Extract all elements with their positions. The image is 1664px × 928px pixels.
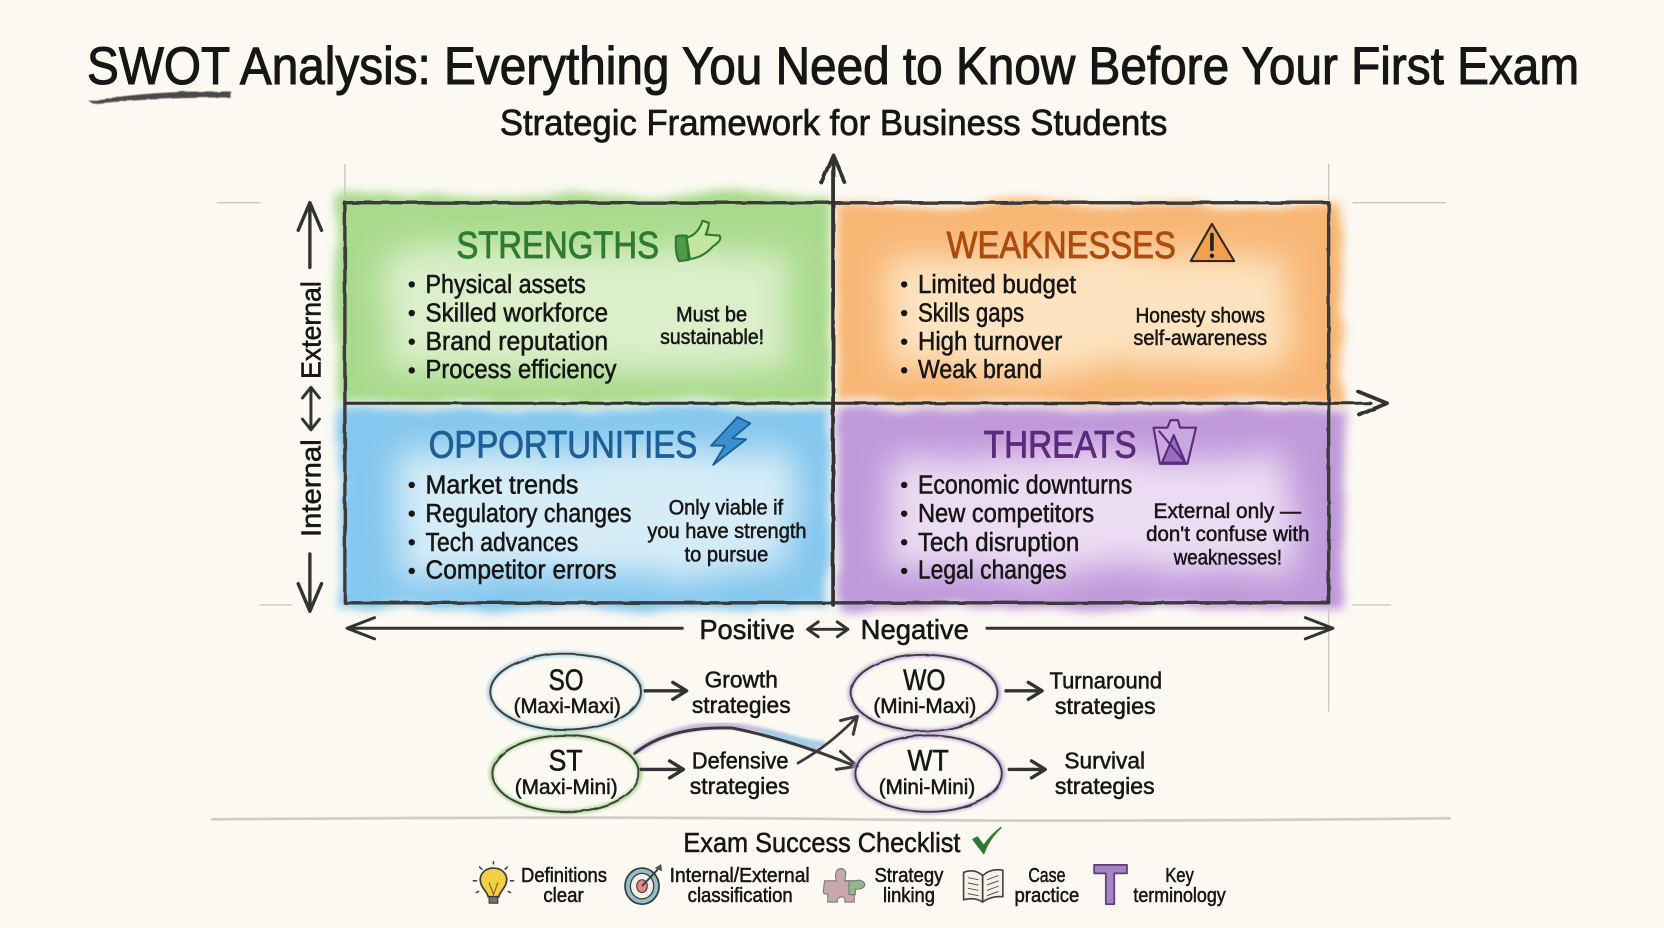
- axis label: positive to negative: Negative: [861, 614, 969, 645]
- panel: strengths: [337, 196, 830, 402]
- icon: open book: [964, 870, 1003, 902]
- list: opportunities: Competitor errors: [426, 556, 617, 584]
- arrow: horizontal axis head: [1358, 392, 1387, 415]
- note: threats: External only —: [1154, 500, 1302, 523]
- icon: target: [625, 864, 662, 904]
- item: strategy linking: [874, 865, 944, 907]
- axis label: internal to external: Internal: [295, 439, 326, 537]
- matrix grid with axis arrows: [345, 155, 1387, 605]
- node: ST: (Maxi-Mini): [515, 776, 618, 799]
- list: strengths: Physical assets: [426, 271, 586, 299]
- label: growth strategies: strategies: [692, 692, 791, 718]
- note: threats: don't confuse with: [1146, 523, 1310, 546]
- list: threats: Legal changes: [918, 556, 1067, 584]
- label: defensive strategies: strategies: [690, 773, 790, 799]
- green watercolor wash: [337, 196, 830, 402]
- item: key terminology: terminology: [1133, 885, 1227, 907]
- axis label: internal to external: [295, 203, 326, 611]
- node: ST: [491, 735, 640, 812]
- label: defensive strategies: [690, 747, 790, 799]
- heading: opportunities: OPPORTUNITIES: [429, 423, 697, 466]
- item: key terminology: Key: [1165, 865, 1195, 887]
- node: WO: (Mini-Maxi): [873, 695, 976, 718]
- icon: letter T: [1094, 865, 1127, 904]
- item: internal external classification: classification: [688, 885, 793, 907]
- label: turnaround strategies: [1050, 668, 1162, 719]
- list: threats: New competitors: [918, 500, 1094, 528]
- list: strengths: [409, 271, 617, 384]
- node: SO: [489, 654, 642, 730]
- node: WT: WT: [907, 744, 949, 777]
- note: opportunities: to pursue: [684, 543, 768, 566]
- purple watercolor wash: [838, 409, 1344, 608]
- label: turnaround strategies: strategies: [1055, 693, 1156, 719]
- list: strengths: Process efficiency: [426, 356, 617, 384]
- icon: threat symbol: [1154, 420, 1196, 464]
- item: case practice: practice: [1015, 885, 1079, 907]
- checklist heading: Exam Success Checklist: [683, 827, 961, 858]
- axis label: positive to negative: [347, 614, 1333, 645]
- node: WT: [854, 735, 1003, 812]
- item: case practice: Case: [1028, 865, 1065, 887]
- icon: warning triangle: [1191, 224, 1234, 261]
- note: strengths: [660, 304, 764, 349]
- item: definitions clear: Definitions: [521, 865, 607, 887]
- item: internal external classification: Internal/External: [670, 865, 810, 887]
- item: internal external classification: [670, 865, 810, 907]
- note: threats: [1146, 500, 1310, 570]
- axis label: internal to external: External: [295, 281, 326, 379]
- list: weaknesses: Weak brand: [918, 356, 1042, 384]
- label: growth strategies: [692, 667, 791, 718]
- list: strengths: Skilled workforce: [426, 300, 608, 328]
- node: SO: (Maxi-Maxi): [514, 695, 621, 718]
- heading: weaknesses: WEAKNESSES: [947, 224, 1176, 267]
- item: strategy linking: linking: [883, 885, 935, 907]
- arrow: WT to survival: [1009, 761, 1045, 778]
- note: weaknesses: self-awareness: [1133, 327, 1267, 350]
- item: definitions clear: clear: [543, 885, 584, 907]
- item: definitions clear: [521, 865, 607, 907]
- checklist items: [473, 862, 1227, 907]
- node: WO: WO: [903, 664, 946, 697]
- node: WT: (Mini-Mini): [879, 776, 975, 799]
- list: weaknesses: [901, 271, 1076, 384]
- blue watercolor wash: [340, 408, 830, 609]
- list: threats: Economic downturns: [918, 471, 1132, 499]
- list: weaknesses: Skills gaps: [918, 300, 1024, 328]
- heading: threats: THREATS: [984, 423, 1137, 466]
- label: survival strategies: [1055, 747, 1155, 799]
- arrow: vertical axis: [821, 155, 845, 605]
- list: threats: Tech disruption: [918, 529, 1079, 557]
- arrow: ST to defensive: [641, 761, 683, 778]
- icon: check mark: [973, 828, 1001, 853]
- icon: puzzle piece: [823, 869, 865, 902]
- note: strengths: sustainable!: [660, 326, 764, 349]
- label: survival strategies: Survival: [1064, 747, 1145, 773]
- list: opportunities: [409, 471, 631, 584]
- arrow: SO to growth: [645, 682, 687, 699]
- note: opportunities: you have strength: [647, 520, 807, 543]
- item: case practice: [1015, 865, 1079, 907]
- item: strategy linking: Strategy: [874, 865, 944, 887]
- note: threats: weaknesses!: [1173, 547, 1282, 570]
- panel: opportunities: [340, 408, 830, 609]
- icon: light bulb: [473, 862, 514, 903]
- node: SO: SO: [549, 664, 584, 697]
- list: strengths: Brand reputation: [426, 328, 608, 356]
- node: ST: ST: [549, 744, 583, 777]
- node: WO: [850, 655, 999, 731]
- axis label: positive to negative: Positive: [699, 614, 795, 645]
- label: growth strategies: Growth: [705, 667, 778, 693]
- subtitle: Strategic Framework for Business Students: [500, 102, 1167, 143]
- note: strengths: Must be: [676, 304, 747, 327]
- panel: threats: [838, 409, 1344, 608]
- label: defensive strategies: Defensive: [692, 747, 788, 773]
- list: opportunities: Regulatory changes: [426, 500, 631, 528]
- list: weaknesses: High turnover: [918, 328, 1063, 356]
- note: opportunities: [647, 497, 807, 566]
- label: turnaround strategies: Turnaround: [1050, 668, 1162, 694]
- icon: lightning bolt: [711, 417, 750, 465]
- list: opportunities: Market trends: [426, 471, 578, 499]
- panel: weaknesses: [838, 205, 1341, 402]
- note: opportunities: Only viable if: [669, 497, 783, 520]
- list: opportunities: Tech advances: [426, 529, 578, 557]
- orange watercolor wash: [838, 205, 1341, 402]
- note: weaknesses: Honesty shows: [1136, 305, 1265, 328]
- connector: crossing curves: [635, 716, 857, 769]
- note: weaknesses: [1133, 305, 1267, 350]
- heading: strengths: STRENGTHS: [456, 224, 659, 267]
- list: weaknesses: Limited budget: [918, 271, 1076, 299]
- item: key terminology: [1133, 865, 1227, 907]
- strategy matrix: [489, 654, 1162, 812]
- label: survival strategies: strategies: [1055, 773, 1155, 799]
- list: threats: [901, 471, 1132, 584]
- icon: thumbs up: [676, 221, 720, 261]
- arrow: WO to turnaround: [1006, 682, 1042, 699]
- faint construction lines: [212, 164, 1450, 821]
